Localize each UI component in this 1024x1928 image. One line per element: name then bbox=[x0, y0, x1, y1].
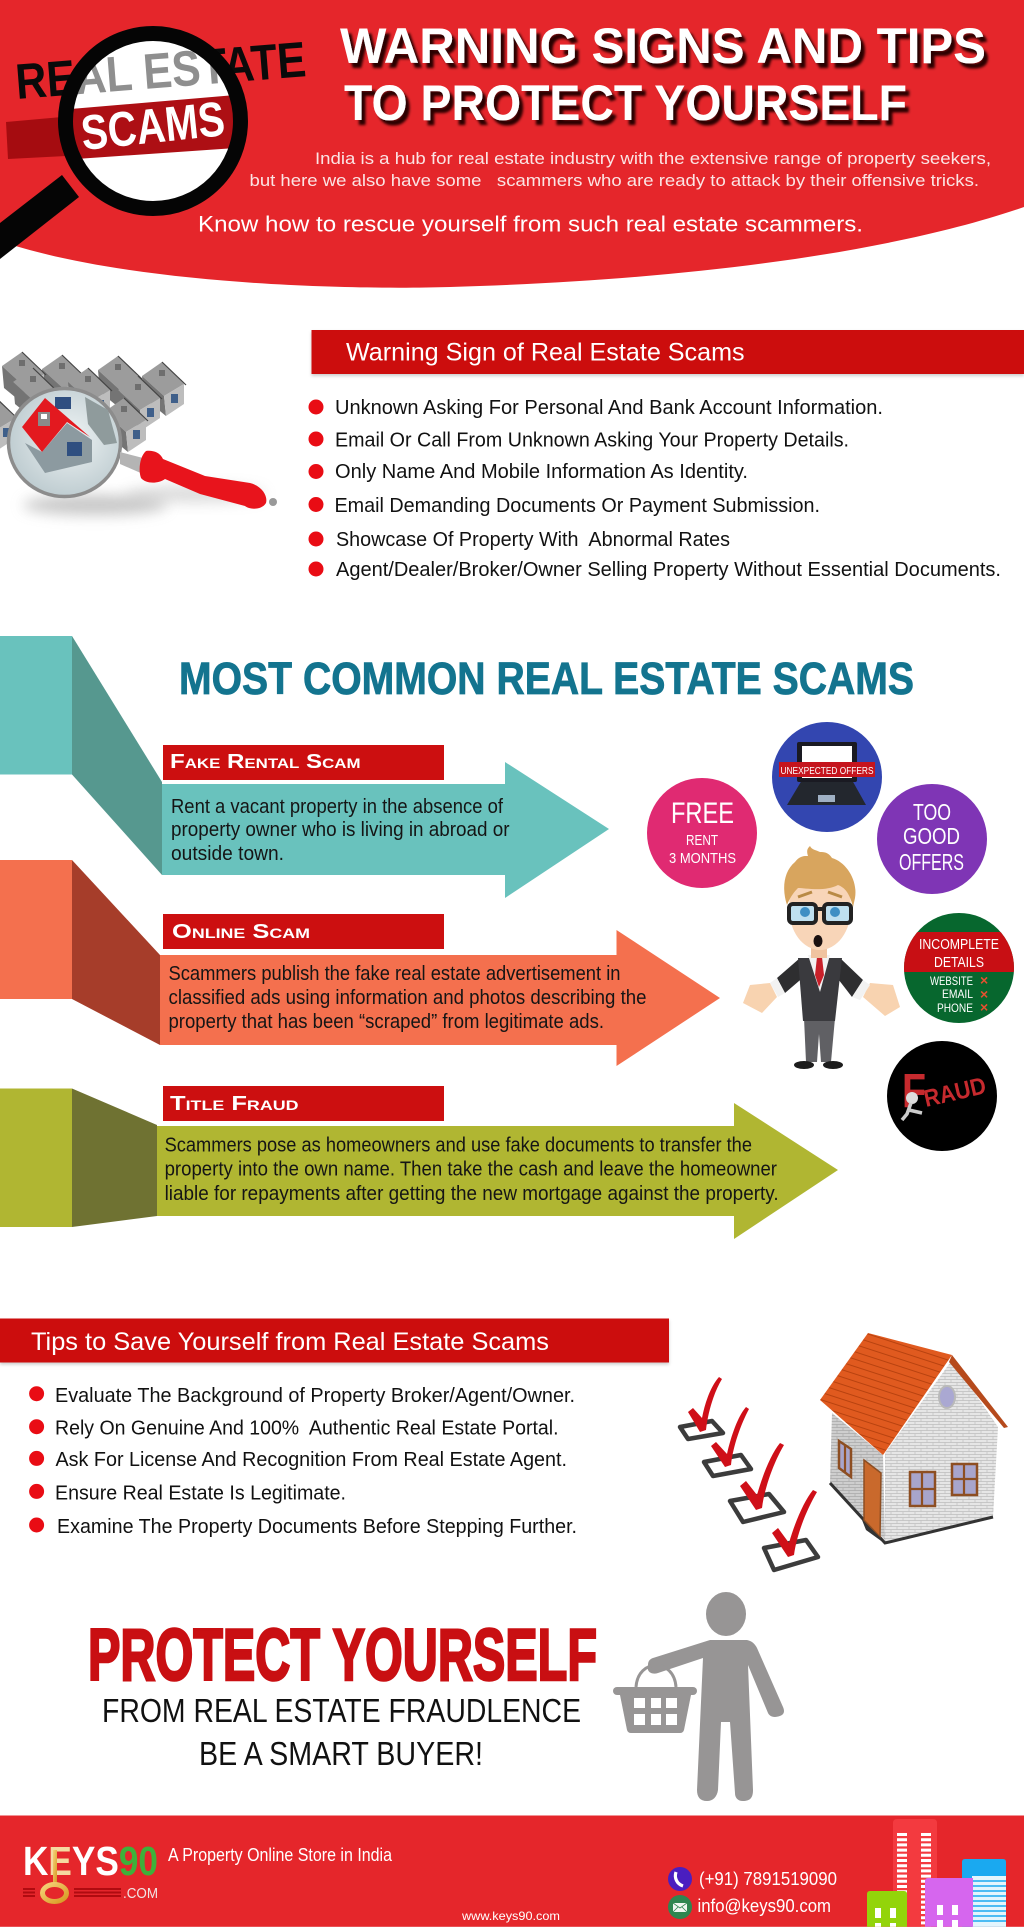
legs bbox=[804, 1018, 835, 1062]
intro text: India is a hub for real estate industry with the extensive range of property seekers, bbox=[315, 149, 991, 168]
circle: incomplete details: × bbox=[980, 986, 988, 1002]
warning bullet list: Email Or Call From Unknown Asking Your Property Details. bbox=[335, 430, 849, 452]
tips bullet list: Examine The Property Documents Before Stepping Further. bbox=[57, 1516, 577, 1538]
door bbox=[864, 1460, 881, 1537]
scam panel: online: classified ads using information and photos describing the bbox=[168, 987, 646, 1009]
logo: keys90: KEYS90 bbox=[23, 1838, 158, 1884]
character: surprised man bbox=[743, 846, 900, 1069]
icon: checklist bbox=[680, 1377, 818, 1570]
scam panel: fake rental bbox=[0, 636, 609, 898]
magnifier ferrule bbox=[120, 452, 143, 474]
tips bullet list: Evaluate The Background of Property Broker/Agent/Owner. bbox=[55, 1385, 575, 1407]
scam panel: title fraud: Scammers pose as homeowners and use fake documents to transfer the bbox=[165, 1134, 752, 1156]
circle: fraud bbox=[887, 1041, 997, 1151]
front wall bbox=[885, 1360, 998, 1542]
circle: too good offers: GOOD bbox=[903, 823, 960, 849]
tips bullet list: Ask For License And Recognition From Real Estate Agent. bbox=[56, 1449, 567, 1471]
basket bbox=[636, 1665, 676, 1687]
scam panel: fake rental: outside town. bbox=[171, 843, 284, 865]
torso bbox=[798, 958, 842, 1021]
intro text bbox=[250, 149, 991, 190]
lens bbox=[66, 34, 240, 208]
circle: fraud: RAUD bbox=[921, 1072, 989, 1113]
tips bullet list bbox=[29, 1385, 577, 1538]
roof bbox=[820, 1333, 952, 1455]
circle: free rent: 3 MONTHS bbox=[669, 850, 736, 867]
section bar: warning signs: Warning Sign of Real Estate Scams bbox=[346, 338, 745, 366]
circle: incomplete details: PHONE bbox=[937, 1001, 973, 1015]
title bbox=[340, 18, 986, 131]
circle: incomplete details: EMAIL bbox=[942, 987, 973, 1001]
warning bullet list: Unknown Asking For Personal And Bank Account Information. bbox=[335, 397, 883, 419]
scam panel: title fraud: property into the own name. Then take the cash and leave the homeowner bbox=[165, 1158, 777, 1180]
heading: most common scams: MOST COMMON REAL ESTATE SCAMS bbox=[179, 653, 914, 704]
red band outside lens bbox=[6, 117, 66, 159]
contact: phone bbox=[668, 1867, 837, 1891]
scams label: SCAMS bbox=[79, 92, 227, 161]
tips bullet list: Ensure Real Estate Is Legitimate. bbox=[55, 1482, 346, 1504]
hair bbox=[784, 846, 855, 907]
section bar: warning signs bbox=[312, 330, 1024, 374]
circle: incomplete details: × bbox=[980, 999, 988, 1015]
cuffs bbox=[770, 978, 785, 997]
real estate text outside lens: REAL ESTATE bbox=[13, 31, 308, 110]
scam panel: online: Online Scam bbox=[172, 921, 310, 943]
warning bullet list: Email Demanding Documents Or Payment Submission. bbox=[334, 495, 820, 517]
circle: too good offers: OFFERS bbox=[899, 849, 964, 875]
circle: incomplete details: INCOMPLETE bbox=[919, 937, 999, 953]
mouth bbox=[814, 935, 822, 947]
arms bbox=[777, 958, 806, 993]
circle: too good offers: TOO bbox=[913, 799, 951, 825]
scam panel: online: property that has been “scraped” from legitimate ads. bbox=[168, 1011, 604, 1033]
tips bullet list: Rely On Genuine And 100% Authentic Real Estate Portal. bbox=[55, 1418, 558, 1440]
base shadow line bbox=[830, 1483, 993, 1543]
website: www.keys90.com bbox=[461, 1909, 560, 1923]
circle: incomplete details bbox=[900, 913, 1020, 1023]
scam panel: online: Scammers publish the fake real estate advertisement in bbox=[168, 963, 620, 985]
call to action: protect yourself bbox=[88, 1615, 597, 1772]
circle: free rent: FREE bbox=[671, 797, 734, 830]
hands bbox=[743, 983, 777, 1013]
scam panel: fake rental: Rent a vacant property in the absence of bbox=[171, 796, 503, 818]
scam panel: fake rental: property owner who is living in abroad or bbox=[171, 819, 510, 841]
header tagline: Know how to rescue yourself from such real estate scammers. bbox=[198, 212, 863, 236]
head bbox=[789, 866, 851, 950]
circle: incomplete details: DETAILS bbox=[934, 955, 984, 971]
header banner bbox=[0, 0, 1024, 288]
neck bbox=[811, 944, 827, 958]
scam panel: fake rental: Fake Rental Scam bbox=[170, 751, 360, 773]
tagline: A Property Online Store in India bbox=[168, 1845, 393, 1865]
real estate text inside lens: REAL ESTATE bbox=[13, 31, 308, 110]
circle: free rent bbox=[647, 778, 757, 888]
lens ring bbox=[66, 34, 240, 208]
scam panel: title fraud: Title Fraud bbox=[170, 1093, 298, 1115]
red handle bbox=[140, 451, 266, 509]
illustration: city buildings bbox=[867, 1819, 1006, 1927]
circle: too good offers bbox=[877, 784, 987, 894]
circle: unexpected offers laptop: UNEXPECTED OFFERS bbox=[780, 765, 874, 777]
contact: phone: (+91) 7891519090 bbox=[699, 1869, 837, 1889]
illustration: houses under magnifier bbox=[0, 352, 277, 515]
logo: keys90: .COM bbox=[123, 1885, 158, 1902]
glasses bbox=[789, 904, 851, 923]
warning bullet list: Showcase Of Property With Abnormal Rates bbox=[336, 529, 730, 551]
side wall bbox=[830, 1413, 885, 1540]
circle: incomplete details: WEBSITE bbox=[930, 974, 973, 988]
call to action: protect yourself: BE A SMART BUYER! bbox=[199, 1735, 483, 1772]
shoes bbox=[794, 1061, 814, 1069]
windows bbox=[839, 1441, 977, 1506]
call to action: protect yourself: FROM REAL ESTATE FRAUDLENCE bbox=[102, 1692, 581, 1729]
magnifier lens bbox=[8, 388, 120, 496]
scam panel: title fraud: liable for repayments after getting the new mortgage against the property. bbox=[165, 1183, 779, 1205]
circle: incomplete details: × bbox=[980, 972, 988, 988]
scam panel: online bbox=[0, 860, 720, 1066]
icon: person with shopping basket bbox=[613, 1592, 784, 1801]
house in lens bbox=[25, 423, 92, 473]
footer bbox=[0, 1816, 1024, 1927]
circle: fraud: F bbox=[902, 1065, 926, 1118]
circle: free rent: RENT bbox=[686, 832, 718, 849]
title: WARNING SIGNS AND TIPS bbox=[340, 18, 986, 74]
title: TO PROTECT YOURSELF bbox=[344, 75, 907, 131]
warning bullet list: Agent/Dealer/Broker/Owner Selling Property Without Essential Documents. bbox=[336, 559, 1001, 581]
logo: keys90 bbox=[23, 1838, 158, 1902]
warning bullet list: Only Name And Mobile Information As Identity. bbox=[335, 461, 748, 483]
contact: email: info@keys90.com bbox=[698, 1896, 831, 1916]
eyebrows bbox=[798, 892, 842, 897]
warning bullet list bbox=[308, 397, 1001, 581]
icon: house bbox=[820, 1333, 1008, 1543]
intro text: but here we also have some scammers who are ready to attack by their offensive tricks. bbox=[250, 171, 979, 190]
house slab in lens bbox=[85, 397, 117, 445]
magnifier logo: real estate scams bbox=[0, 31, 308, 259]
section bar: tips: Tips to Save Yourself from Real Estate Scams bbox=[31, 1328, 549, 1356]
scam panel: title fraud bbox=[0, 1086, 838, 1239]
attic vent bbox=[939, 1386, 955, 1408]
section bar: tips bbox=[0, 1318, 669, 1362]
call to action: protect yourself: PROTECT YOURSELF bbox=[88, 1615, 597, 1696]
contact: email bbox=[668, 1895, 831, 1919]
circle: unexpected offers laptop bbox=[772, 722, 882, 832]
real estate text inside lens bbox=[73, 50, 233, 159]
magnifier handle bbox=[0, 175, 79, 259]
